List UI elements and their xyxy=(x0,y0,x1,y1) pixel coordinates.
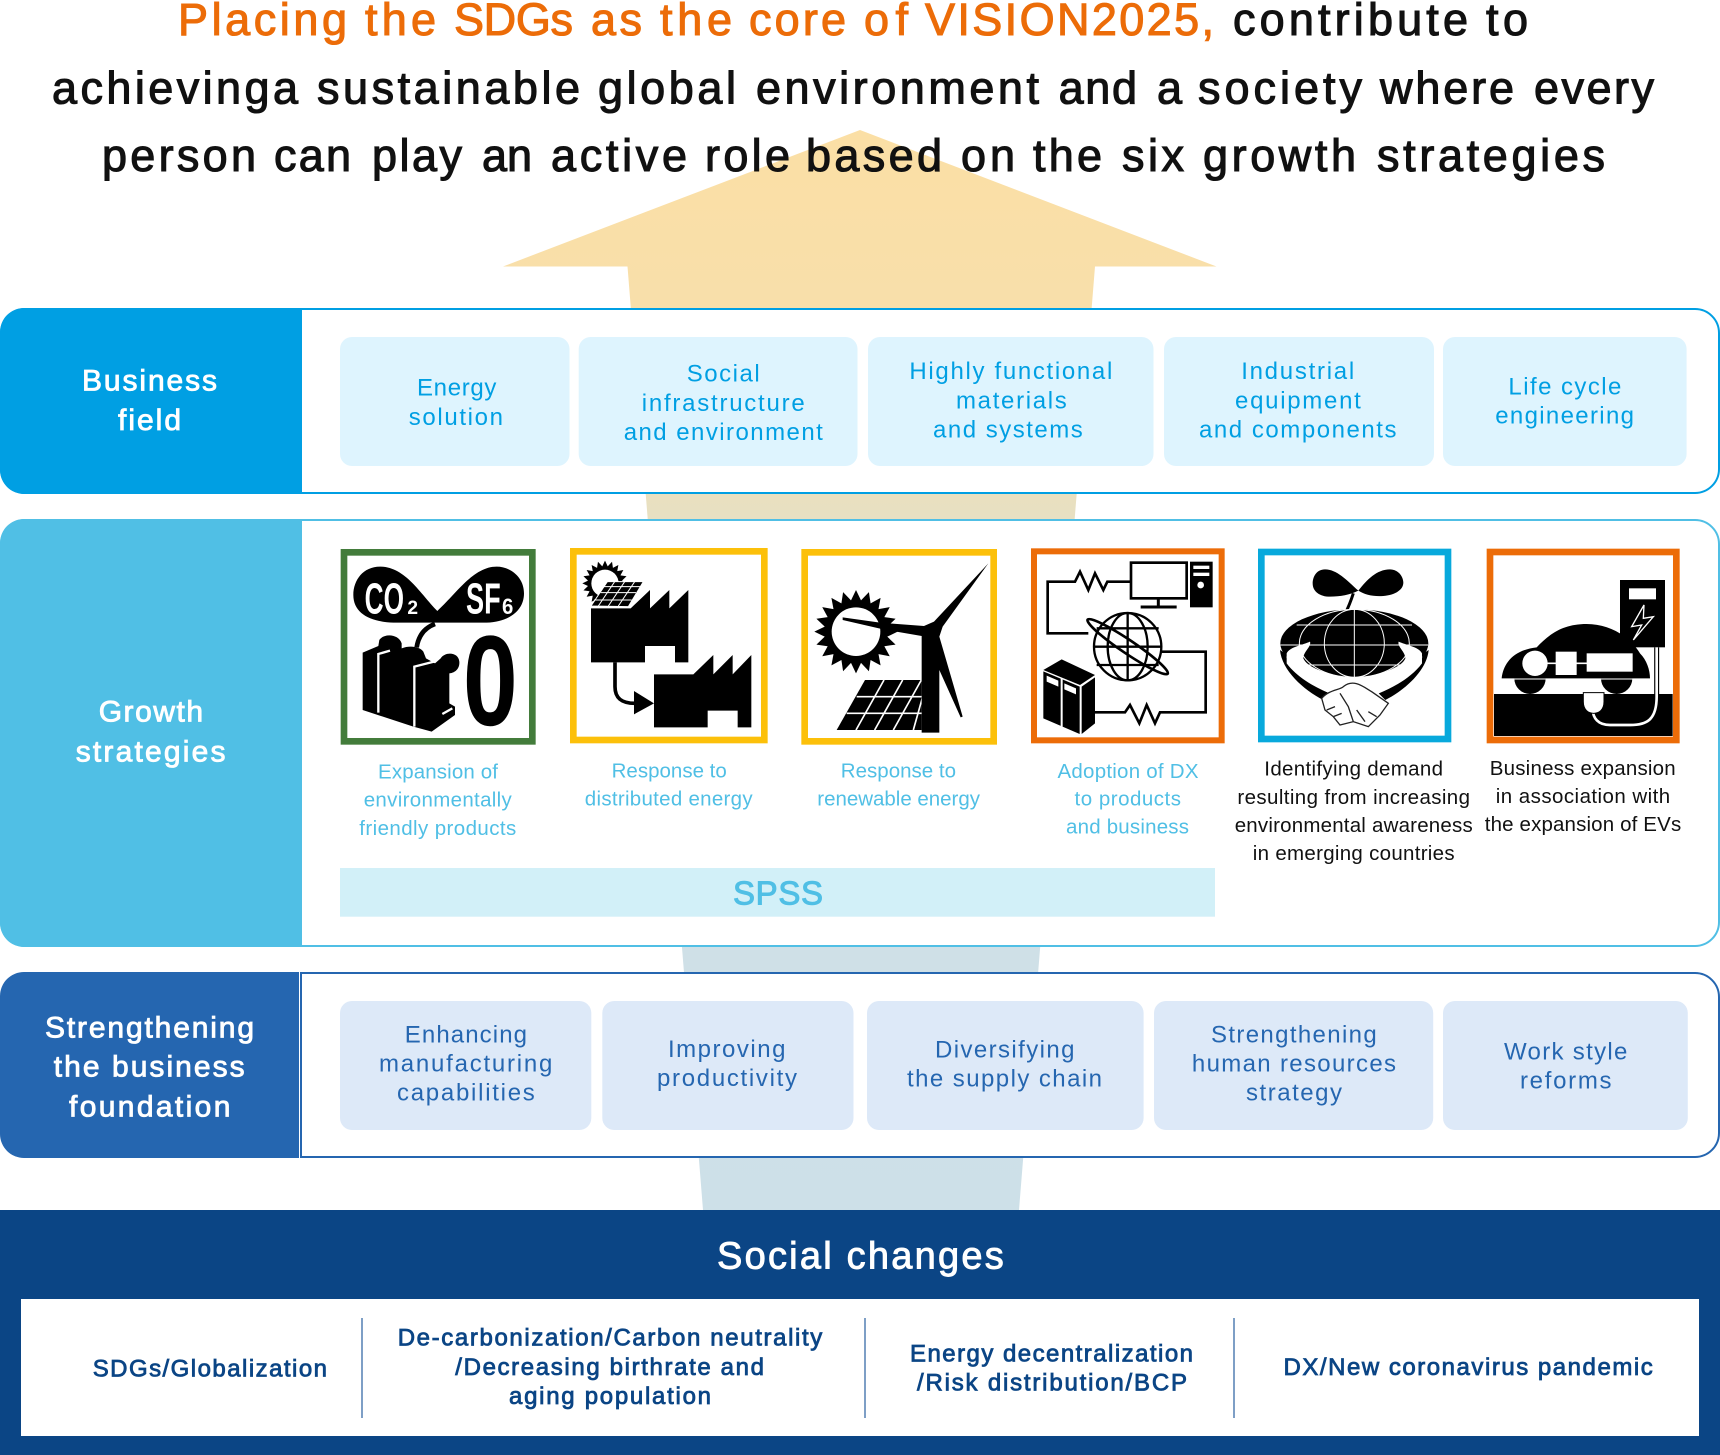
box: energy solution xyxy=(340,337,570,466)
box: highly functional materials and systems: materials xyxy=(956,387,1067,414)
box: diversifying the supply chain: the supply chain xyxy=(907,1066,1102,1093)
heading: strengthening the business foundation: the business xyxy=(54,1051,245,1084)
icon: globe with sprout and handshake xyxy=(1261,552,1448,739)
heading: growth strategies: Growth xyxy=(99,696,203,729)
title: play xyxy=(372,130,462,181)
caption: EV business expansion xyxy=(1485,757,1681,836)
icon: DX network xyxy=(1034,551,1222,740)
title: strategies xyxy=(1377,130,1605,181)
caption: environmentally friendly products: friendly products xyxy=(359,817,516,840)
box: work style reforms xyxy=(1443,1001,1688,1130)
caption: environmentally friendly products xyxy=(359,760,516,840)
caption: emerging countries demand xyxy=(1235,758,1473,865)
title xyxy=(52,0,1654,181)
item: energy decentralization: Energy decentralization xyxy=(910,1341,1193,1368)
box: work style reforms: Work style xyxy=(1504,1039,1627,1066)
box: strengthening human resources strategy: strategy xyxy=(1246,1080,1342,1107)
title: active xyxy=(551,130,687,181)
title: role xyxy=(705,130,790,181)
heading: growth strategies xyxy=(0,519,302,947)
title: the xyxy=(1033,130,1102,181)
caption: environmentally friendly products: Expansion of xyxy=(378,760,498,783)
title: every xyxy=(1534,62,1654,114)
caption: EV business expansion: the expansion of EVs xyxy=(1485,813,1681,836)
caption: environmentally friendly products: environmentally xyxy=(364,789,513,812)
box: improving productivity: productivity xyxy=(657,1065,797,1092)
caption: renewable energy xyxy=(817,759,981,811)
icon: CO2 SF6 zero equipment: 0 xyxy=(463,610,518,753)
box: energy solution: Energy xyxy=(417,375,496,402)
box: enhancing manufacturing capabilities: manufacturing xyxy=(379,1051,552,1078)
white list box xyxy=(21,1299,1699,1436)
item: energy decentralization: /Risk distribution/BCP xyxy=(917,1370,1187,1397)
item: decarbonization and aging population: /Decreasing birthrate and xyxy=(455,1354,764,1381)
bar: SPSS xyxy=(340,868,1215,917)
box: work style reforms: reforms xyxy=(1520,1068,1612,1095)
box: industrial equipment and components: equipment xyxy=(1235,387,1361,414)
title: achievinga xyxy=(52,62,299,114)
box: enhancing manufacturing capabilities xyxy=(340,1001,591,1130)
title: on xyxy=(961,130,1015,181)
caption: DX adoption: and business xyxy=(1066,816,1189,839)
caption: EV business expansion: Business expansion xyxy=(1490,757,1676,780)
box: social infrastructure and environment: and environment xyxy=(624,419,823,446)
title: growth xyxy=(1203,130,1356,181)
title: where xyxy=(1379,62,1514,114)
box: industrial equipment and components: and components xyxy=(1199,416,1396,443)
icon: sun, wind turbine and solar panel xyxy=(805,552,994,741)
icon: CO2 SF6 zero equipment: CO xyxy=(365,575,404,624)
box: life cycle engineering: engineering xyxy=(1495,402,1634,429)
icon: CO2 SF6 zero equipment: SF xyxy=(466,575,501,624)
item: SDGs and globalization: SDGs/Globalization xyxy=(93,1356,327,1383)
caption: emerging countries demand: resulting from increasing xyxy=(1237,786,1470,809)
box: diversifying the supply chain xyxy=(867,1001,1144,1130)
caption: emerging countries demand: Identifying demand xyxy=(1264,758,1443,781)
title: six xyxy=(1122,130,1184,181)
box: social infrastructure and environment xyxy=(579,337,858,466)
icon: CO2 SF6 zero equipment: 2 xyxy=(407,598,418,619)
caption: distributed energy: distributed energy xyxy=(585,788,753,811)
box: improving productivity: Improving xyxy=(668,1036,786,1063)
box: enhancing manufacturing capabilities: Enhancing xyxy=(405,1022,527,1049)
heading: strengthening the business foundation xyxy=(0,972,299,1158)
box: social infrastructure and environment: Social xyxy=(687,361,760,388)
panel: business field xyxy=(0,308,1719,494)
heading: business field xyxy=(0,308,302,494)
item: decarbonization and aging population xyxy=(398,1325,822,1410)
heading: social changes: Social changes xyxy=(717,1235,1004,1277)
box: strengthening human resources strategy: Strengthening xyxy=(1211,1022,1377,1049)
title: can xyxy=(274,130,351,181)
box: industrial equipment and components xyxy=(1164,337,1434,466)
title: an xyxy=(482,130,532,181)
item: DX and coronavirus pandemic: DX/New coronavirus pandemic xyxy=(1284,1354,1653,1381)
bar: SPSS: SPSS xyxy=(733,874,823,911)
box: diversifying the supply chain: Diversifying xyxy=(935,1037,1074,1064)
panel: strengthening the business foundation xyxy=(0,972,1719,1158)
title: environment xyxy=(756,62,1039,114)
title: person xyxy=(102,130,256,181)
icon: CO2 SF6 zero equipment: 6 xyxy=(502,594,513,619)
box: strengthening human resources strategy xyxy=(1154,1001,1433,1130)
icon: electric vehicle charging xyxy=(1490,552,1676,740)
title: sustainable xyxy=(317,62,580,114)
heading: strengthening the business foundation: foundation xyxy=(69,1091,230,1124)
panel: social changes xyxy=(0,1210,1720,1455)
caption: emerging countries demand: environmental awareness xyxy=(1235,814,1473,837)
icon: CO2 SF6 zero equipment xyxy=(344,552,532,753)
title: global xyxy=(598,62,736,114)
box: industrial equipment and components: Industrial xyxy=(1241,358,1354,385)
heading: business field: field xyxy=(118,404,181,437)
heading: business field: Business xyxy=(82,365,217,398)
box: highly functional materials and systems: Highly functional xyxy=(909,358,1112,385)
heading: strengthening the business foundation: Strengthening xyxy=(45,1011,254,1044)
caption: DX adoption: Adoption of DX xyxy=(1058,760,1199,783)
box: energy solution: solution xyxy=(409,404,503,431)
caption: distributed energy xyxy=(585,760,753,811)
arrow: upward background arrow xyxy=(503,130,1216,1210)
heading: growth strategies: strategies xyxy=(76,736,226,769)
box: social infrastructure and environment: infrastructure xyxy=(642,390,805,417)
caption: DX adoption: to products xyxy=(1074,788,1181,811)
title: and xyxy=(1059,62,1137,114)
icon: distributed energy factories xyxy=(573,551,764,740)
title: based xyxy=(806,130,942,181)
title: a xyxy=(1157,62,1183,114)
box: highly functional materials and systems: and systems xyxy=(933,416,1083,443)
caption: emerging countries demand: in emerging countries xyxy=(1253,842,1455,865)
caption: DX adoption xyxy=(1058,760,1199,839)
box: life cycle engineering: Life cycle xyxy=(1508,373,1621,400)
caption: renewable energy: Response to xyxy=(841,759,956,782)
caption: distributed energy: Response to xyxy=(612,760,727,783)
box: enhancing manufacturing capabilities: capabilities xyxy=(397,1080,535,1107)
item: energy decentralization xyxy=(910,1341,1193,1397)
item: decarbonization and aging population: De-carbonization/Carbon neutrality xyxy=(398,1325,822,1352)
item: decarbonization and aging population: aging population xyxy=(509,1383,711,1410)
title: society xyxy=(1198,62,1362,114)
box: strengthening human resources strategy: human resources xyxy=(1192,1051,1396,1078)
box: improving productivity xyxy=(602,1001,854,1130)
panel: growth strategies xyxy=(0,519,1719,947)
box: life cycle engineering xyxy=(1443,337,1687,466)
caption: renewable energy: renewable energy xyxy=(817,788,981,811)
box: highly functional materials and systems xyxy=(868,337,1154,466)
caption: EV business expansion: in association with xyxy=(1496,785,1670,808)
